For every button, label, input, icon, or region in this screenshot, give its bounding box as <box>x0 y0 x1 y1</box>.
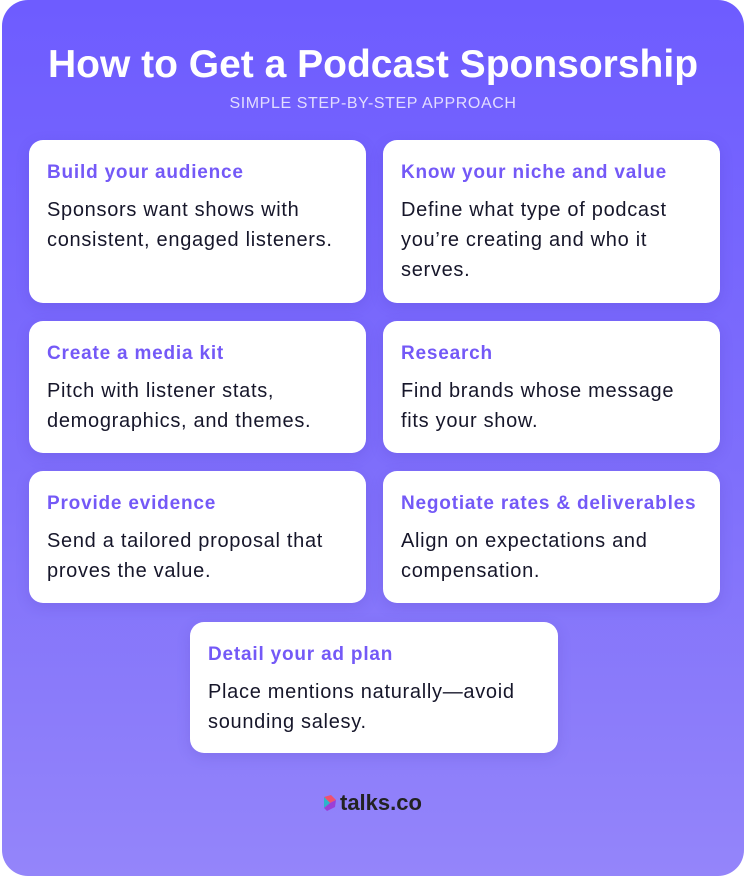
title: How to Get a Podcast Sponsorship <box>48 43 698 86</box>
card: provide evidence: Send a tailored proposal that proves the value. <box>47 530 323 582</box>
card: build your audience: Sponsors want shows with consistent, engaged listeners. <box>47 199 333 251</box>
card: ad plan: Place mentions naturally—avoid sounding salesy. <box>208 681 515 733</box>
card: negotiate: Align on expectations and compensation. <box>401 530 648 582</box>
logo: talks.co <box>340 790 422 815</box>
card: research: Find brands whose message fits your show. <box>401 380 674 432</box>
card: provide evidence <box>29 471 366 603</box>
card: research <box>383 321 720 453</box>
card: ad plan: Detail your ad plan <box>208 644 393 665</box>
card: know your niche <box>383 140 720 303</box>
card: provide evidence: Provide evidence <box>47 493 216 514</box>
card: negotiate <box>383 471 720 603</box>
card: know your niche: Define what type of podcast you’re creating and who it serves. <box>401 199 667 281</box>
subtitle: SIMPLE STEP-BY-STEP APPROACH <box>229 95 517 112</box>
card: media kit: Create a media kit <box>47 343 224 364</box>
card: research: Research <box>401 343 493 364</box>
card: build your audience: Build your audience <box>47 162 244 183</box>
card: know your niche: Know your niche and value <box>401 162 667 183</box>
card: build your audience <box>29 140 366 303</box>
card: ad plan <box>190 622 558 753</box>
card: media kit <box>29 321 366 453</box>
card: media kit: Pitch with listener stats, demographics, and themes. <box>47 380 311 432</box>
card: negotiate: Negotiate rates & deliverables <box>401 493 696 514</box>
